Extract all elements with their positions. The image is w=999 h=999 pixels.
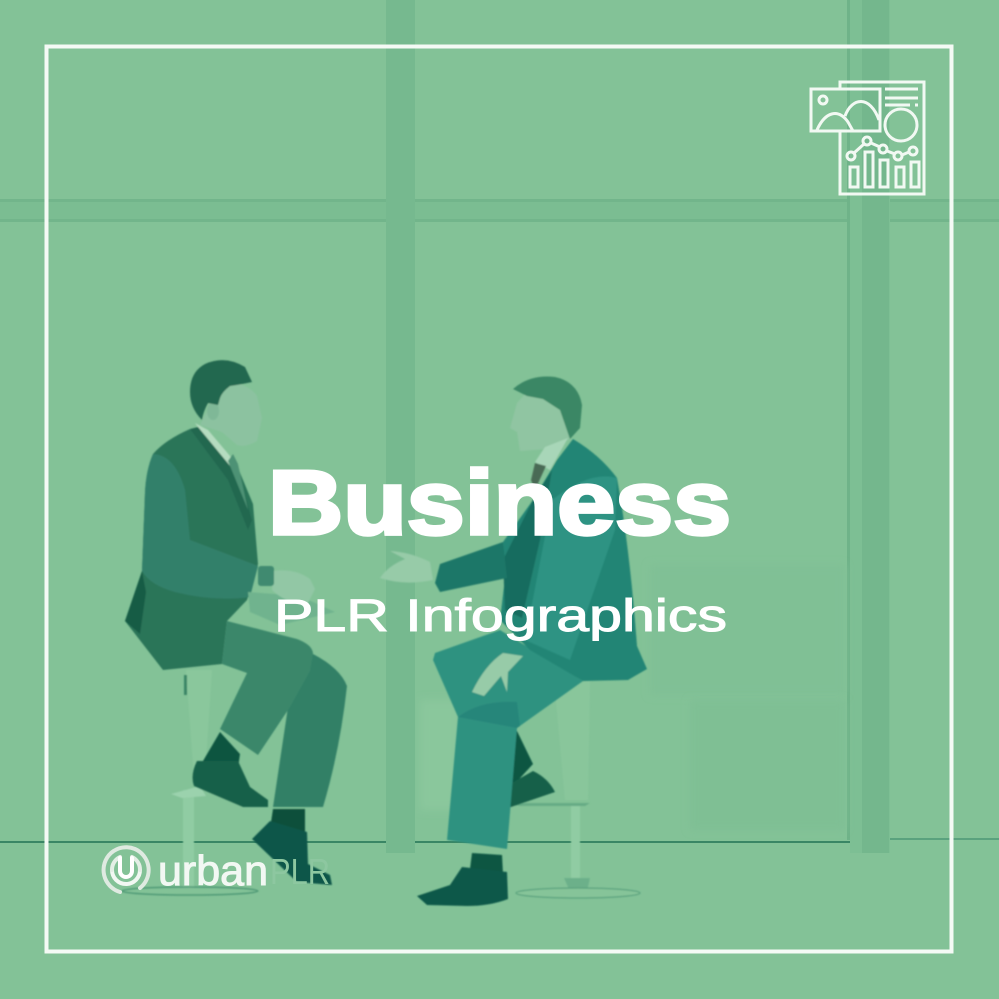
shoe far [252, 821, 332, 885]
back shoe [508, 771, 555, 808]
sock far [270, 809, 305, 832]
jacket tail shadow [125, 571, 146, 634]
picture frame [811, 89, 880, 131]
shoe near [193, 761, 268, 807]
circle chart [885, 109, 917, 141]
picture hills [817, 101, 879, 131]
lapel [190, 427, 252, 530]
logo wordmark PLR: PLR [270, 851, 330, 892]
jacket sleeve [525, 476, 617, 660]
shirt [195, 423, 252, 520]
hair [190, 360, 252, 420]
front shoe [417, 867, 508, 906]
front leg [220, 621, 313, 755]
bar chart [850, 152, 919, 187]
tie [228, 454, 248, 510]
outstretched hand [380, 551, 433, 583]
hair [513, 376, 582, 439]
left stool [122, 670, 258, 895]
face [510, 392, 570, 451]
document outline [840, 82, 924, 194]
sock near [203, 732, 240, 768]
text lines [885, 89, 918, 105]
jacket [500, 439, 647, 681]
tablet [248, 592, 335, 625]
outstretched sleeve [435, 542, 507, 592]
subtitle: PLR Infographics: PLR Infographics [274, 590, 727, 641]
left businessman [125, 360, 347, 885]
pants knee fold [458, 702, 520, 728]
hand [272, 570, 315, 605]
front sock [470, 853, 503, 874]
neck and face [200, 382, 262, 446]
logo wordmark urban: urban [158, 847, 268, 894]
jacket [125, 429, 258, 670]
watch [258, 566, 274, 586]
line chart [847, 137, 917, 160]
jacket sleeve [142, 454, 258, 599]
back leg [273, 654, 347, 807]
back sock [507, 731, 533, 789]
logo: urbanPLR [104, 847, 330, 894]
title: Business: Business [268, 453, 731, 554]
tie [531, 463, 546, 490]
right businessman [380, 376, 647, 906]
pants [433, 630, 583, 849]
right stool [510, 680, 640, 898]
ear [207, 402, 219, 420]
logo mark [104, 847, 149, 892]
collar [535, 438, 568, 470]
icon: report with image and charts [811, 82, 924, 194]
picture sun [819, 96, 827, 104]
knee hand [472, 653, 523, 696]
jacket dark front [503, 470, 552, 618]
